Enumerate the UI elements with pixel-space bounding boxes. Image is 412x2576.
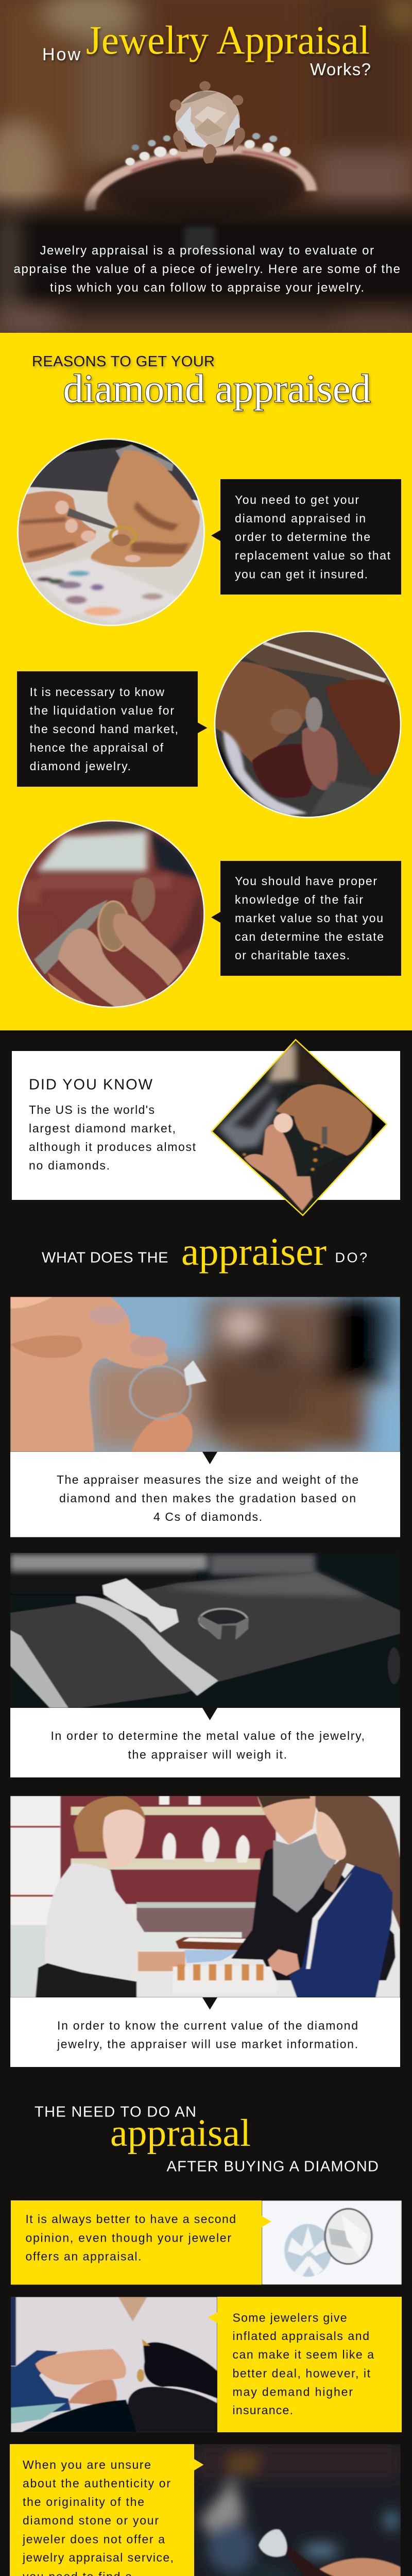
caption box: 4 Cs of diamonds. (153, 1510, 262, 1523)
reason 2 callout: It is necessary to know (30, 685, 164, 699)
photo: gloved hands showing rings (11, 2297, 217, 2432)
panel: inflated appraisals (11, 2297, 402, 2432)
title: Jewelry Appraisal (86, 18, 370, 62)
heading: the need to do an appraisal: THE NEED TO DO AN (35, 2104, 196, 2121)
title: Works? (310, 60, 371, 79)
caption box: In order to determine the metal value of the jewelry, (50, 1729, 365, 1742)
text: inflated appraisals and (233, 2329, 369, 2343)
text: about the authenticity or (23, 2477, 170, 2490)
photo: ring on gift box in black and white (10, 1553, 401, 1708)
reason 1 callout: diamond appraised in (235, 512, 366, 525)
caption box (10, 1708, 400, 1777)
reason 2 callout (17, 671, 207, 787)
caption box: the appraiser will weigh it. (128, 1748, 287, 1761)
intro text: Jewelry appraisal is a professional way to evaluate or (40, 244, 374, 258)
arrow (194, 2459, 203, 2470)
text: diamond stone or your (23, 2514, 159, 2527)
reason 2 callout: the liquidation value for (30, 704, 174, 717)
text: the originality of the (23, 2495, 144, 2509)
reason 1 callout: You need to get your (235, 493, 359, 506)
caption box: In order to know the current value of the diamond (57, 2019, 358, 2032)
panel: appraiser step 2 (10, 1553, 401, 1777)
heading: the need to do an appraisal (35, 2104, 379, 2175)
text (26, 2212, 236, 2263)
reason 2 callout: the second hand market, (30, 722, 178, 736)
text: Some jewelers give (233, 2311, 347, 2324)
text: jeweler does not offer a (22, 2533, 165, 2546)
intro text: appraise the value of a piece of jewelry. Here are some of the (13, 262, 400, 276)
intro text: tips which you can follow to appraise your jewelry. (50, 281, 364, 295)
reason 1 callout: order to determine the (235, 530, 370, 544)
heading: what does the appraiser do: WHAT DOES THE (42, 1250, 168, 1266)
heading: diamond appraised (63, 366, 371, 411)
photo: ring held up near an eye (10, 1297, 400, 1462)
reason 1 callout: replacement value so that (235, 549, 391, 562)
photo: two diamonds (262, 2200, 402, 2285)
text (22, 2458, 174, 2576)
reason 3 photo: fingers holding engraved ring (18, 821, 204, 1007)
text: jewelry appraisal service, (22, 2551, 174, 2564)
text: insurance. (233, 2403, 293, 2417)
heading: the need to do an appraisal: AFTER BUYING A DIAMOND (167, 2159, 379, 2175)
heading: REASONS TO GET YOUR (32, 353, 215, 370)
reason 2 photo: hands holding a ring (215, 631, 401, 817)
text: can make it seem like a (233, 2348, 374, 2361)
reason 3 callout: You should have proper (235, 874, 377, 888)
reason 3 callout: can determine the estate (235, 930, 384, 943)
heading: what does the appraiser do (42, 1230, 367, 1274)
arrow (262, 2216, 271, 2227)
text (233, 2311, 374, 2417)
panel: hero (0, 0, 412, 334)
text: better deal, however, it (233, 2367, 371, 2380)
caption box (10, 1997, 400, 2067)
text: When you are unsure (23, 2458, 151, 2471)
text: It is always better to have a second (26, 2212, 236, 2226)
fact text (29, 1103, 196, 1172)
heading: what does the appraiser do: appraiser (181, 1230, 327, 1274)
arrow (208, 2312, 217, 2323)
reason 1 callout: you can get it insured. (235, 568, 368, 581)
reason 2 callout: hence the appraisal of (30, 741, 164, 754)
title (42, 18, 371, 79)
panel: appraiser step 1 (10, 1297, 400, 1537)
heading: DID YOU KNOW (29, 1077, 153, 1093)
text: may demand higher (233, 2385, 353, 2399)
panel: second opinion (11, 2200, 402, 2285)
reason 3 callout: knowledge of the fair (235, 893, 363, 906)
panel: did you know (12, 1040, 400, 1215)
caption box: jewelry, the appraiser will use market information. (57, 2038, 358, 2051)
reason 3 callout: or charitable taxes. (235, 948, 350, 962)
photo: diamond ring close-up (0, 0, 412, 334)
fact text: largest diamond market, (29, 1122, 176, 1135)
panel: reasons to get your diamond appraised (0, 333, 412, 1030)
text: offers an appraisal. (26, 2250, 141, 2263)
panel: finding an appraiser (10, 2444, 401, 2576)
fact text: no diamonds. (29, 1159, 110, 1172)
fact text: although it produces almost (29, 1140, 196, 1154)
reason 2 callout: diamond jewelry. (30, 759, 131, 773)
heading: what does the appraiser do: DO? (335, 1250, 367, 1265)
photo: hand holding raw diamond on a stick (194, 2444, 401, 2576)
text: opinion, even though your jeweler (26, 2231, 231, 2244)
reason 3 callout: market value so that you (235, 911, 383, 925)
reason 1 photo: hands with ring and tweezers (18, 439, 204, 625)
reason 1 callout (211, 479, 401, 595)
diamond photo: rough stone in hand (212, 1040, 387, 1215)
panel: appraiser step 3 (10, 1796, 400, 2067)
photo: jeweler showing rings to a couple (10, 1796, 400, 1997)
heading: the need to do an appraisal: appraisal (110, 2112, 251, 2155)
caption box: diamond and then makes the gradation based on (59, 1492, 356, 1505)
title: How (42, 45, 80, 64)
reason 3 callout (211, 861, 401, 976)
caption box: The appraiser measures the size and weight of the (57, 1473, 358, 1486)
intro text (13, 244, 400, 295)
fact text: The US is the world's (29, 1103, 154, 1116)
caption box (10, 1452, 400, 1537)
